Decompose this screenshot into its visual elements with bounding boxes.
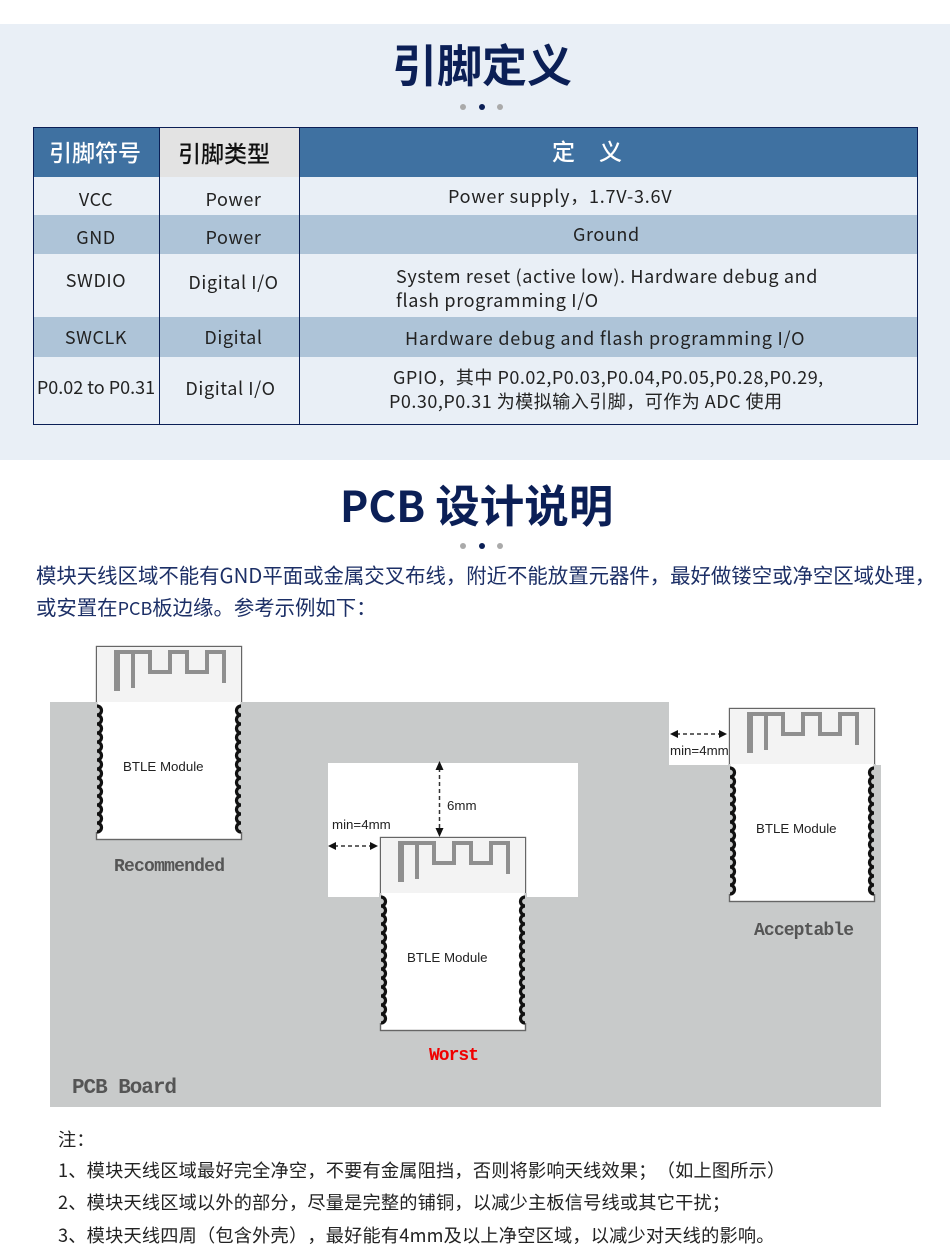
row: SWCLK: SWCLK (65, 324, 127, 350)
label: Recommended: Recommended (114, 857, 225, 877)
label: Worst: Worst (429, 1046, 479, 1066)
row: SWDIO type: Digital I/O (188, 269, 279, 295)
title: PCB design notes: PCB 设计说明 (340, 470, 613, 535)
notes (58, 1126, 785, 1248)
note heading: 注： (58, 1126, 95, 1152)
row: VCC definition: Power supply，1.7V-3.6V (448, 183, 672, 209)
row: SWCLK type: Digital (204, 324, 263, 350)
row: GPIO type: Digital I/O (185, 375, 276, 401)
row: SWDIO definition: System reset (active low). Hardware debug and (396, 263, 818, 289)
paragraph: antenna area guidance (36, 559, 935, 621)
keepout cut-out (328, 763, 578, 897)
row: GPIO: P0.02 to P0.31 (37, 374, 155, 400)
row: GND type: Power (205, 224, 262, 250)
diagram: PCB module placement (50, 646, 881, 1107)
module: acceptable (728, 708, 876, 902)
row: SWDIO definition (396, 263, 818, 313)
label: PCB Board: PCB Board (72, 1077, 177, 1100)
row: SWCLK definition: Hardware debug and flash programming I/O (405, 325, 805, 351)
PCB board (50, 702, 881, 1107)
paragraph: antenna area guidance: 或安置在PCB板边缘。参考示例如下： (36, 591, 377, 621)
row: GPIO definition: GPIO，其中 P0.02,P0.03,P0.04,P0.05,P0.28,P0.29, (393, 364, 824, 390)
panel: pin definition background (0, 24, 950, 460)
module: recommended (95, 646, 243, 840)
module: recommended: BTLE Module (123, 759, 204, 774)
dimension: min=4mm right: min=4mm (670, 743, 729, 758)
dimension: 6mm: 6mm (447, 798, 477, 813)
row: GPIO definition (389, 364, 824, 414)
note 2: 2、模块天线区域以外的部分，尽量是完整的铺铜，以减少主板信号线或其它干扰； (58, 1189, 730, 1215)
label: Acceptable: Acceptable (754, 921, 854, 941)
row: GND definition: Ground (573, 221, 640, 247)
table stripe: GND row (33, 215, 918, 254)
table stripe: SWCLK row (33, 317, 918, 357)
row: GND: GND (76, 224, 116, 250)
row: VCC type: Power (205, 186, 262, 212)
note 1: 1、模块天线区域最好完全净空，不要有金属阻挡，否则将影响天线效果；（如上图所示） (58, 1157, 785, 1183)
decorative dots: PCB heading (460, 543, 503, 549)
table header: pin symbol (33, 127, 160, 177)
table: pin definitions (33, 127, 918, 425)
header text: 引脚类型: 引脚类型 (178, 135, 270, 169)
module: worst (379, 838, 527, 1030)
dimension: min=4mm left (328, 817, 391, 850)
note 3: 3、模块天线四周（包含外壳），最好能有4mm及以上净空区域，以减少对天线的影响。 (58, 1222, 775, 1248)
dimension: min=4mm right (670, 730, 729, 758)
paragraph: antenna area guidance: 模块天线区域不能有GND平面或金属交叉布线，附近不能放置元器件，最好做镂空或净空区域处理， (36, 559, 935, 589)
row: SWDIO: SWDIO (66, 267, 126, 293)
row: VCC: VCC (79, 186, 113, 212)
module: acceptable: BTLE Module (756, 821, 837, 836)
decorative dots: pin definition heading (460, 104, 503, 110)
row: SWDIO definition: flash programming I/O (396, 287, 599, 313)
header text: 引脚符号: 引脚符号 (49, 134, 141, 168)
module: worst: BTLE Module (407, 950, 488, 965)
table header: pin type (160, 127, 300, 177)
title: pin definition: 引脚定义 (392, 30, 572, 95)
table header: definition (300, 127, 918, 177)
dimension: 6mm (436, 761, 477, 837)
header text: 定义: 定义 (552, 133, 646, 167)
row: GPIO definition: P0.30,P0.31 为模拟输入引脚，可作为 ADC 使用 (389, 388, 783, 414)
dimension: min=4mm left: min=4mm (332, 817, 391, 832)
